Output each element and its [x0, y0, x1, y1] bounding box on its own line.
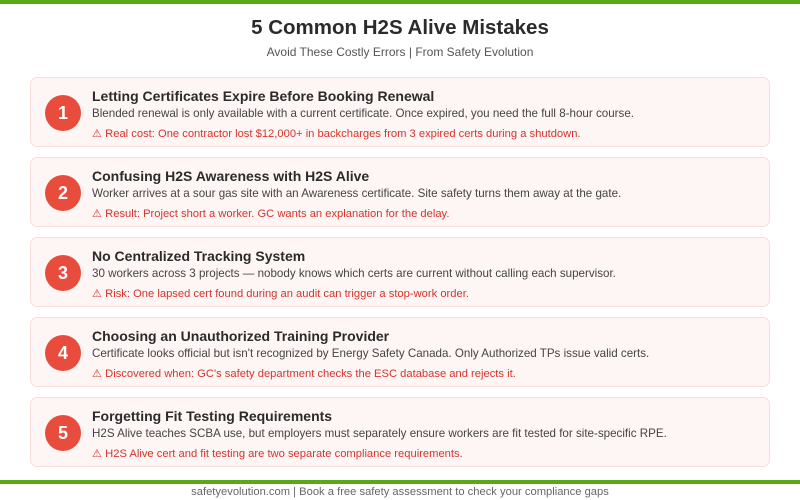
panel: mistake 2 — [30, 157, 770, 227]
warning 5: ⚠ H2S Alive cert and fit testing are two separate compliance requirements. — [92, 448, 463, 460]
heading 4: Choosing an Unauthorized Training Provider — [92, 328, 389, 344]
text 4: Certificate looks official but isn't recognized by Energy Safety Canada. Only Authorized TPs issue valid certs. — [92, 347, 649, 360]
text 3: 30 workers across 3 projects — nobody knows which certs are current without calling each supervisor. — [92, 267, 616, 280]
icon: number 2: 2 — [58, 183, 68, 203]
warning 2: ⚠ Result: Project short a worker. GC wants an explanation for the delay. — [92, 208, 449, 220]
icon: number 1: 1 — [58, 103, 68, 123]
warning 1: ⚠ Real cost: One contractor lost $12,000+ in backcharges from 3 expired certs during a shutdown. — [92, 128, 581, 140]
icon: number 3: 3 — [58, 263, 68, 283]
icon: number 2 — [45, 175, 81, 211]
subtitle: Avoid These Costly Errors | From Safety Evolution — [267, 45, 533, 59]
heading 5: Forgetting Fit Testing Requirements — [92, 408, 332, 424]
icon: number 5: 5 — [58, 423, 68, 443]
warning 3: ⚠ Risk: One lapsed cert found during an audit can trigger a stop-work order. — [92, 288, 469, 300]
icon: number 4: 4 — [58, 343, 68, 363]
panel: mistake 5 — [30, 397, 770, 467]
icon: number 1 — [45, 95, 81, 131]
text 5: H2S Alive teaches SCBA use, but employers must separately ensure workers are fit tested for site-specific RPE. — [92, 427, 667, 440]
panel: mistake 3 — [30, 237, 770, 307]
title: 5 Common H2S Alive Mistakes — [251, 16, 549, 39]
icon: number 5 — [45, 415, 81, 451]
icon: number 4 — [45, 335, 81, 371]
heading 1: Letting Certificates Expire Before Booking Renewal — [92, 88, 434, 104]
panel: mistake 1 — [30, 77, 770, 147]
panel: mistake 4 — [30, 317, 770, 387]
heading 3: No Centralized Tracking System — [92, 248, 305, 264]
text 2: Worker arrives at a sour gas site with an Awareness certificate. Site safety turns them away at the gate. — [92, 187, 621, 200]
heading 2: Confusing H2S Awareness with H2S Alive — [92, 168, 369, 184]
footer: safetyevolution.com | Book a free safety assessment to check your compliance gaps — [191, 486, 609, 498]
warning 4: ⚠ Discovered when: GC's safety department checks the ESC database and rejects it. — [92, 368, 516, 380]
icon: number 3 — [45, 255, 81, 291]
text 1: Blended renewal is only available with a current certificate. Once expired, you need the full 8-hour course. — [92, 107, 634, 120]
